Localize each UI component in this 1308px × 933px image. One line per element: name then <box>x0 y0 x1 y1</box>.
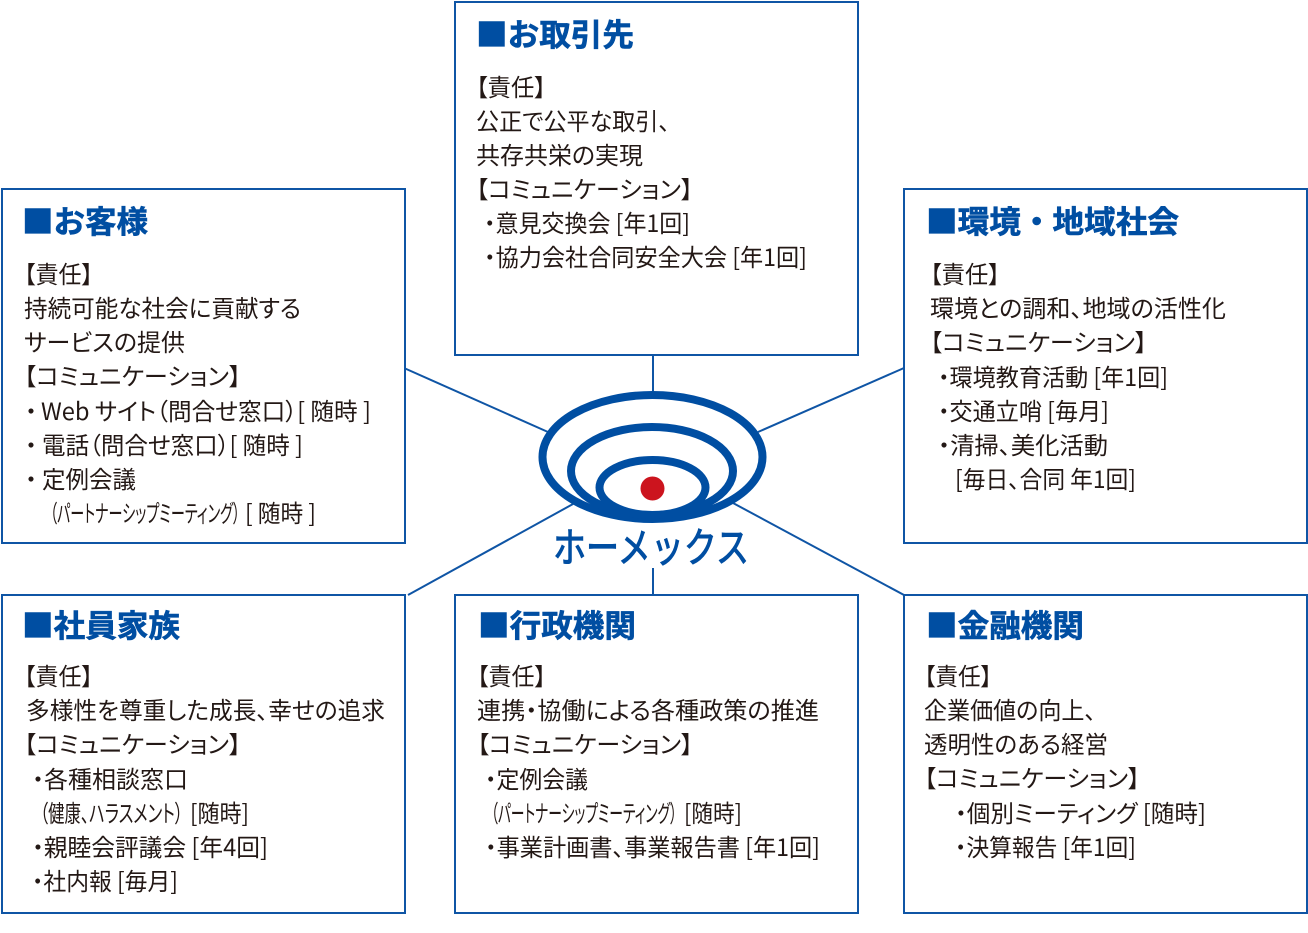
text block: government agencies: 【コミュニケーション】 <box>477 725 693 760</box>
text block: government agencies: ・事業計画書、事業報告書 [年1回] <box>485 828 820 863</box>
text block: customers: 【責任】 <box>24 255 93 290</box>
logo: HOMEX concentric ellipses and wordmark <box>542 395 762 574</box>
text block: government agencies: （パートナーシップミーティング） <box>491 794 677 829</box>
text block: financial institutions: ・決算報告 [年1回] <box>955 828 1136 863</box>
text block: employees and families: [随時] <box>190 794 249 829</box>
text block: financial institutions: ・個別ミーティング [随時] <box>955 794 1206 829</box>
text block: government agencies: 連携・協働による各種政策の推進 <box>477 691 819 726</box>
text block: financial institutions: 透明性のある経営 <box>924 725 1108 760</box>
wordmark: ホーメックス <box>553 514 749 574</box>
text block: environment and community: 【責任】 <box>930 255 1000 290</box>
text block: government agencies: ・定例会議 <box>485 760 588 795</box>
text block: environment and community: [毎日、合同 年1回] <box>955 460 1136 495</box>
text block: employees and families: ・親睦会評議会 [年4回] <box>32 828 268 863</box>
text block: business partners: 【コミュニケーション】 <box>476 170 693 205</box>
text block: government agencies: 【責任】 <box>477 657 546 692</box>
text block: government agencies <box>477 657 820 863</box>
text block: environment and community: 環境との調和、地域の活性化 <box>930 289 1226 324</box>
heading: environment and community: ■環境・地域社会 <box>926 197 1179 242</box>
text block: business partners: 【責任】 <box>476 68 546 103</box>
text block: environment and community: ・交通立哨 [毎月] <box>938 392 1109 427</box>
text block: customers: ・ <box>25 460 37 495</box>
text block: customers: [ 随時 ] <box>245 494 316 529</box>
text block: employees and families: 【責任】 <box>24 657 93 692</box>
text block: customers: ・ <box>25 392 37 427</box>
text block: customers: ・ <box>25 426 37 461</box>
text block: environment and community <box>930 255 1226 495</box>
panel: business partners <box>455 2 858 355</box>
text block: employees and families: ・社内報 [毎月] <box>32 862 178 897</box>
icon: concentric ellipses <box>542 395 762 519</box>
text block: financial institutions: 【責任】 <box>924 657 992 692</box>
panel: environment and community <box>904 189 1307 543</box>
text block: customers: Web サイト（問合せ窓口）[ 随時 ] <box>41 392 371 427</box>
panel: financial institutions <box>904 595 1307 913</box>
text block: employees and families: 多様性を尊重した成長、幸せの追求 <box>26 691 385 726</box>
text block: financial institutions: 【コミュニケーション】 <box>924 759 1140 794</box>
text block: customers: （パートナーシップミーティング） <box>50 494 240 529</box>
text block: employees and families: 【コミュニケーション】 <box>24 725 241 760</box>
panel: employees and families <box>2 595 405 913</box>
text block: customers: 定例会議 <box>42 460 136 495</box>
text block: customers <box>24 255 371 529</box>
text block: financial institutions: 企業価値の向上、 <box>924 691 1096 726</box>
icon: red centre dot <box>640 476 664 500</box>
heading: employees and families: ■社員家族 <box>22 601 180 646</box>
text block: customers: 電話（問合せ窓口）[ 随時 ] <box>42 426 303 461</box>
panel: customers <box>2 189 405 543</box>
heading: financial institutions: ■金融機関 <box>926 601 1084 646</box>
heading: business partners: ■お取引先 <box>476 10 634 55</box>
text block: employees and families <box>24 657 385 897</box>
text block: customers: 持続可能な社会に貢献する <box>24 289 301 324</box>
text block: employees and families: （健康、ハラスメント） <box>40 794 183 829</box>
text block: customers: サービスの提供 <box>24 323 185 358</box>
panel: government agencies <box>455 595 858 913</box>
heading: government agencies: ■行政機関 <box>478 601 636 646</box>
heading: customers: ■お客様 <box>22 197 148 242</box>
text block: business partners <box>476 68 807 273</box>
text block: business partners: 共存共栄の実現 <box>476 136 643 171</box>
text block: financial institutions <box>924 657 1206 863</box>
text block: environment and community: ・環境教育活動 [年1回] <box>938 358 1168 393</box>
text block: business partners: ・意見交換会 [年1回] <box>484 204 690 239</box>
text block: business partners: ・協力会社合同安全大会 [年1回] <box>484 238 807 273</box>
text block: government agencies: [随時] <box>684 794 742 829</box>
text block: business partners: 公正で公平な取引、 <box>476 102 670 137</box>
text block: environment and community: 【コミュニケーション】 <box>930 323 1147 358</box>
text block: employees and families: ・各種相談窓口 <box>32 760 188 795</box>
text block: customers: 【コミュニケーション】 <box>24 357 241 392</box>
connector lines <box>404 355 904 595</box>
text block: environment and community: ・清掃、美化活動 <box>938 426 1108 461</box>
